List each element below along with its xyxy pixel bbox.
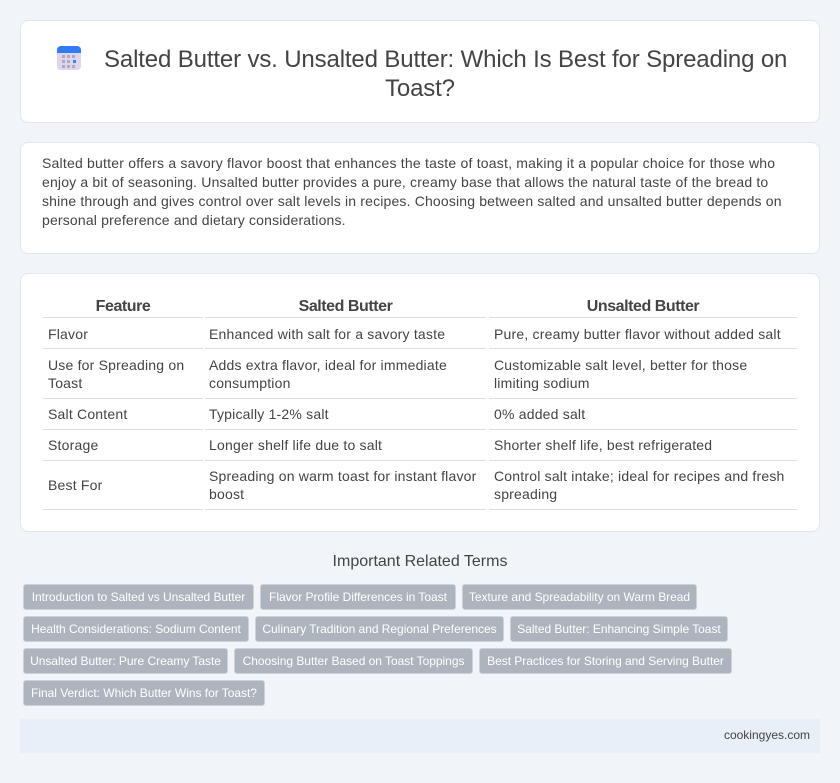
panel: comparison table	[20, 273, 820, 532]
title	[104, 46, 787, 102]
title card	[20, 20, 820, 123]
row: use for spreading: Toast	[48, 375, 82, 391]
panel: comparison table: Spreading on warm toast for instant flavor	[209, 468, 477, 484]
title: Salted Butter vs. Unsalted Butter: Which Is Best for Spreading on	[104, 46, 787, 73]
panel: comparison table: Salted Butter	[299, 298, 392, 315]
row: use for spreading	[48, 357, 184, 391]
related term chips: Salted Butter: Enhancing Simple Toast	[517, 622, 721, 636]
heading: related terms: Important Related Terms	[333, 553, 507, 570]
icon: calendar	[57, 46, 81, 70]
related term chips: Final Verdict: Which Butter Wins for Toast?	[31, 686, 257, 700]
related term chips: Choosing Butter Based on Toast Toppings	[243, 654, 464, 668]
related term chips	[23, 584, 732, 706]
description text: personal preference and dietary considerations.	[42, 212, 346, 228]
panel: comparison table: Customizable salt level, better for those	[494, 357, 747, 373]
related term chips: Culinary Tradition and Regional Preferences	[262, 622, 497, 636]
panel: description	[20, 142, 820, 254]
panel: comparison table: Unsalted Butter	[587, 298, 699, 315]
row: storage: Storage	[48, 437, 98, 453]
description text	[42, 155, 782, 228]
description text: Salted butter offers a savory flavor boost that enhances the taste of toast, making it a popular choice for those who	[42, 155, 775, 171]
panel: comparison table: Enhanced with salt for a savory taste	[209, 326, 445, 342]
panel: comparison table: Typically 1-2% salt	[209, 406, 329, 422]
panel: comparison table: Adds extra flavor, ideal for immediate	[209, 357, 447, 373]
panel: comparison table: boost	[209, 486, 244, 502]
description text: enjoy a bit of seasoning. Unsalted butter provides a pure, creamy base that allows the natural taste of the bread to	[42, 174, 768, 190]
panel: comparison table: limiting sodium	[494, 375, 590, 391]
table header: Feature	[96, 298, 150, 315]
panel: comparison table: 0% added salt	[494, 406, 585, 422]
panel: comparison table: Shorter shelf life, best refrigerated	[494, 437, 712, 453]
panel: comparison table: spreading	[494, 486, 557, 502]
panel: comparison table: consumption	[209, 375, 291, 391]
title: Toast?	[385, 75, 455, 102]
row: best for: Best For	[48, 477, 103, 493]
row: flavor: Flavor	[48, 326, 88, 342]
related term chips: Unsalted Butter: Pure Creamy Taste	[30, 654, 221, 668]
footer source: cookingyes.com	[724, 728, 810, 742]
related term chips: Health Considerations: Sodium Content	[31, 622, 241, 636]
related term chips: Texture and Spreadability on Warm Bread	[469, 590, 690, 604]
related term chips: Flavor Profile Differences in Toast	[269, 590, 447, 604]
related term chips: Introduction to Salted vs Unsalted Butter	[32, 590, 245, 604]
panel: comparison table: Longer shelf life due to salt	[209, 437, 382, 453]
row: salt content: Salt Content	[48, 406, 127, 422]
row: use for spreading: Use for Spreading on	[48, 357, 184, 373]
related term chips: Best Practices for Storing and Serving Butter	[487, 654, 724, 668]
description text: shine through and gives control over salt levels in recipes. Choosing between salted and unsalted butter depends on	[42, 193, 782, 209]
panel: comparison table: Pure, creamy butter flavor without added salt	[494, 326, 781, 342]
footer	[20, 719, 820, 753]
panel: comparison table: Control salt intake; ideal for recipes and fresh	[494, 468, 785, 484]
